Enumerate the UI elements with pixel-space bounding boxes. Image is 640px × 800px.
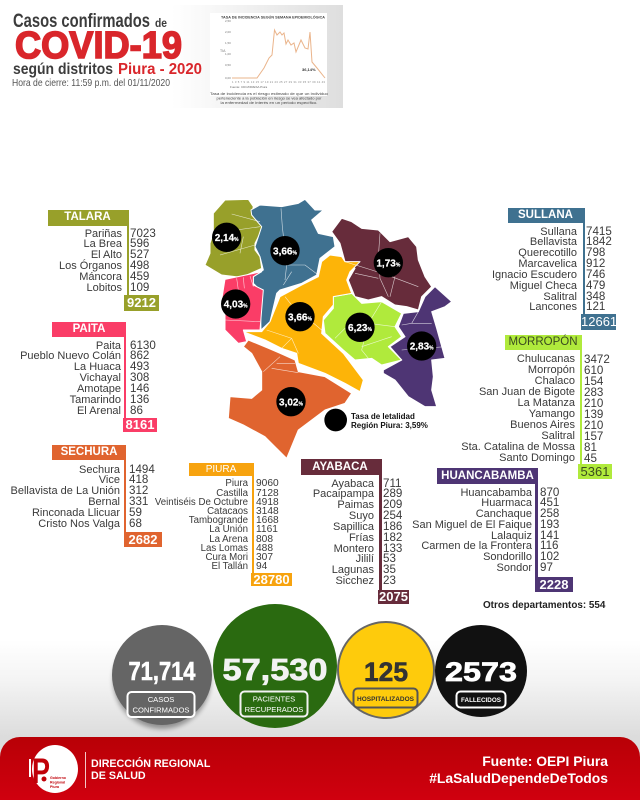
district values: 116 <box>540 539 558 552</box>
heading: Sullana: SULLANA <box>518 209 573 221</box>
district names: Sullana <box>540 226 577 238</box>
heading: Sechura: SECHURA <box>61 446 117 458</box>
district values: 289 <box>383 487 402 500</box>
district names: Huancabamba <box>460 486 532 498</box>
footer heading <box>91 757 210 782</box>
district names: Máncora <box>79 271 122 283</box>
chart value: 36,14% <box>302 67 316 72</box>
logo: Gobierno Regional Piura: Gobierno <box>50 776 67 780</box>
district names: El Arenal <box>77 405 121 417</box>
stat: recovered patients: 57,530 <box>222 652 328 687</box>
line <box>232 30 325 78</box>
legend: regional lethality rate <box>324 409 428 431</box>
heading: Ayabaca <box>301 459 379 475</box>
lethality rate badge: Huancabamba <box>407 331 436 361</box>
district values: 862 <box>130 349 149 362</box>
district values: 68 <box>129 517 142 530</box>
district names: Sapillica <box>333 521 374 533</box>
district names: Ayabaca <box>331 478 374 490</box>
district values: 1161 <box>256 524 278 535</box>
axis labels: 1,00 <box>225 52 231 56</box>
district names: Morropón <box>528 364 575 376</box>
title line: casos confirmados: Casos confirmados <box>13 11 150 32</box>
district values: 3472 <box>584 352 610 366</box>
stat: hospitalized: HOSPITALIZADOS <box>357 696 415 703</box>
district values: 121 <box>586 300 605 313</box>
panel: Sullana <box>492 208 617 330</box>
district values: 53 <box>383 552 396 565</box>
district values: 808 <box>256 534 273 545</box>
heading: Paita: PAITA <box>73 323 105 335</box>
district values: 97 <box>540 561 553 574</box>
heading: Huancabamba: HUANCABAMBA <box>441 470 534 482</box>
district names: Paimas <box>337 499 374 511</box>
province: Sullana <box>251 199 335 330</box>
district values: 35 <box>383 563 396 576</box>
district names: Frías <box>349 532 374 544</box>
logo: Gobierno Regional Piura: Regional <box>50 780 65 784</box>
district names: La Matanza <box>518 396 575 408</box>
district names: Yamango <box>529 408 575 420</box>
district values <box>130 339 156 417</box>
chart footnote <box>210 91 328 105</box>
district names: Montero <box>334 543 374 555</box>
stat: recovered patients <box>213 604 337 728</box>
district values: 157 <box>584 430 603 442</box>
legend: regional lethality rate: Tasa de letalidad <box>351 412 415 421</box>
stat: deaths: FALLECIDOS <box>461 697 502 704</box>
district names: Piura <box>225 478 248 489</box>
panel: Huancabamba <box>412 468 573 592</box>
district names: San Juan de Bigote <box>479 386 575 398</box>
axis labels: 1,50 <box>225 41 231 45</box>
province: Morropón <box>323 293 402 365</box>
district names <box>11 464 120 530</box>
district values: 912 <box>586 257 605 270</box>
district values <box>584 352 610 464</box>
subtitle: según distritos <box>13 61 113 78</box>
other departments note: Otros departamentos: 554 <box>483 600 605 611</box>
heading: Piura: PIURA <box>206 464 236 475</box>
district values: 4918 <box>256 497 279 508</box>
district values: 7415 <box>586 224 612 238</box>
district values: 479 <box>586 279 605 292</box>
district values <box>540 486 559 574</box>
district names: Chalaco <box>535 374 575 386</box>
district values: 193 <box>540 518 559 531</box>
district values: 109 <box>130 281 149 294</box>
district names <box>461 352 575 464</box>
district values: 45 <box>584 452 597 464</box>
total: 2682 <box>129 532 157 547</box>
incidence line chart <box>210 13 328 105</box>
title: COVID-19: COVID-19 <box>15 25 182 67</box>
district values <box>383 476 402 587</box>
stat: hospitalized: 125 <box>364 657 408 687</box>
title line: casos confirmados: de <box>155 18 167 30</box>
district names <box>313 478 374 587</box>
chart footnote: perteneciente a la población en riesgo se vea afectado por <box>216 96 322 100</box>
axis labels: 2,00 <box>225 30 231 34</box>
district names: Lobitos <box>87 282 122 294</box>
district values: 493 <box>130 360 149 373</box>
district names: Tambogrande <box>189 515 248 526</box>
chart footnote: Tasa de incidencia es el riesgo estimado de que un individuo <box>210 91 328 96</box>
lethality rate badge: Paita: 4,03% <box>224 300 248 311</box>
district names: Canchaque <box>476 508 532 520</box>
stat: recovered patients: PACIENTES <box>253 694 295 704</box>
district names: Cristo Nos Valga <box>38 518 120 530</box>
district names: Marcavelica <box>518 258 577 270</box>
lethality rate badge: Huancabamba: 2,83% <box>410 342 434 353</box>
total: 2075 <box>379 589 408 604</box>
district values: 3148 <box>256 506 279 517</box>
divider <box>85 752 86 788</box>
panel: Sechura <box>11 445 162 547</box>
lethality rate badge: Piura <box>285 302 315 331</box>
panel: Talara <box>48 210 159 311</box>
district values: 418 <box>129 473 148 486</box>
district values <box>256 478 279 572</box>
district names: Vichayal <box>80 372 121 384</box>
district names: El Tallán <box>212 561 248 572</box>
district names: Bellavista de La Unión <box>11 485 120 497</box>
district values: 308 <box>130 371 149 384</box>
district names: Sechura <box>79 464 120 476</box>
axis labels: TIA <box>220 49 226 53</box>
district names: Lalaquiz <box>491 530 532 542</box>
district values: 9060 <box>256 478 279 489</box>
district values: 94 <box>256 561 267 572</box>
district values: 312 <box>129 484 148 497</box>
district names: La Unión <box>209 524 248 535</box>
district values: 102 <box>540 550 559 563</box>
district names: Salitral <box>541 430 575 442</box>
panel: Paita <box>20 322 157 432</box>
district values: 139 <box>584 408 603 420</box>
district values: 141 <box>540 528 559 542</box>
district names: Pariñas <box>85 228 122 240</box>
stat: confirmed cases: CONFIRMADOS <box>133 706 189 714</box>
district values: 527 <box>130 248 149 261</box>
stat: confirmed cases: 71,714 <box>128 656 196 686</box>
district names: Catacaos <box>207 506 248 517</box>
district values: 258 <box>540 507 559 520</box>
district names: Pueblo Nuevo Colán <box>20 350 121 362</box>
province: Huancabamba <box>383 287 452 407</box>
lethality rate badge: Ayabaca: 1,73% <box>376 258 401 269</box>
district values: 7023 <box>130 227 156 240</box>
district values: 711 <box>383 476 401 490</box>
district values: 86 <box>130 404 143 417</box>
heading: Talara: TALARA <box>64 211 111 223</box>
source and hashtag: #LaSaludDependeDeTodos <box>429 770 608 786</box>
total: 9212 <box>127 295 156 310</box>
district values: 146 <box>130 382 149 395</box>
district values: 7128 <box>256 488 279 499</box>
subtitle: Piura - 2020 <box>118 61 202 78</box>
lethality rate badge: Talara <box>212 223 241 252</box>
lethality rate badge: Sullana: 3,66% <box>273 246 298 257</box>
district values: 254 <box>383 509 402 522</box>
district values: 596 <box>130 237 149 250</box>
district values <box>129 463 155 530</box>
district names: San Miguel de El Faique <box>412 519 532 531</box>
district names: Carmen de la Frontera <box>421 540 532 552</box>
district names <box>20 340 121 417</box>
lethality rate badge: Ayabaca <box>374 248 403 277</box>
district values: 1842 <box>586 235 612 248</box>
heading: Talara <box>48 210 127 226</box>
header background panel <box>0 5 343 108</box>
district values: 870 <box>540 486 559 498</box>
district names: Salitral <box>543 291 577 303</box>
district names: Sondor <box>497 562 532 574</box>
district names: Tamarindo <box>70 394 121 406</box>
district values: 283 <box>584 386 603 398</box>
lethality rate badge: Piura: 3,66% <box>288 312 313 323</box>
stat: confirmed cases <box>112 625 212 729</box>
lethality rate badge: Sechura <box>276 387 306 416</box>
district names: Miguel Checa <box>510 280 577 292</box>
district names: Paita <box>96 340 121 352</box>
district names: Castilla <box>216 488 248 499</box>
district names: Huarmaca <box>481 497 532 509</box>
source and hashtag <box>429 753 608 786</box>
province: Ayabaca <box>332 218 432 310</box>
stat: hospitalized <box>338 622 434 718</box>
district values: 6130 <box>130 339 156 352</box>
district names: Suyo <box>349 510 374 522</box>
panel: Piura <box>155 463 292 587</box>
axis labels: 0,00 <box>225 76 231 80</box>
district names: Veintiséis De Octubre <box>155 497 248 508</box>
district values: 451 <box>540 496 559 509</box>
stat: deaths <box>435 625 527 717</box>
district values: 210 <box>584 418 603 432</box>
district names: Cura Mori <box>205 552 248 563</box>
heading: Sullana <box>508 208 583 223</box>
district names: Sondorillo <box>483 551 532 563</box>
chart footnote: la enfermedad de interés en un periodo específico. <box>220 100 317 105</box>
district names: Bellavista <box>530 236 577 248</box>
province: Talara <box>205 199 262 277</box>
district names: Los Órganos <box>59 260 122 272</box>
title block <box>12 11 202 89</box>
heading: Paita <box>52 322 126 337</box>
district values: 59 <box>129 506 142 519</box>
total: 5361 <box>581 464 609 479</box>
district values: 498 <box>130 259 149 272</box>
district values: 307 <box>256 552 273 563</box>
district names: Jililí <box>356 553 374 565</box>
district names: La Huaca <box>74 361 121 373</box>
map of Piura provinces <box>206 200 451 458</box>
lethality rate badge: Sechura: 3,02% <box>279 397 304 408</box>
lethality rate badge: Paita <box>221 289 250 319</box>
district values: 459 <box>130 270 149 283</box>
panel: Morropón <box>461 334 612 479</box>
province: Piura <box>243 255 363 392</box>
district names: Ignacio Escudero <box>492 269 577 281</box>
heading: Huancabamba <box>437 468 538 484</box>
district values: 154 <box>584 374 603 388</box>
chart title: TASA DE INCIDENCIA SEGÚN SEMANA EPIDEMIOLÓGICA <box>221 14 325 20</box>
district values: 136 <box>130 393 149 406</box>
district names: Lancones <box>529 301 577 313</box>
district names: Pacaipampa <box>313 488 374 500</box>
district names: Buenos Aires <box>510 418 575 430</box>
district values: 23 <box>383 574 396 587</box>
stat: recovered patients: RECUPERADOS <box>245 705 303 714</box>
district values: 610 <box>584 364 603 376</box>
legend: regional lethality rate: Región Piura: 3,59% <box>351 421 428 430</box>
district values: 210 <box>584 396 603 410</box>
summary statistics <box>110 604 527 732</box>
district values: 798 <box>586 246 605 259</box>
stat: deaths: 2573 <box>445 657 517 687</box>
panel: Ayabaca <box>301 459 409 604</box>
province: Sechura <box>228 340 352 458</box>
total: 28780 <box>253 572 290 587</box>
axis caption: Fuente: CDC/DIRESA Piura <box>230 85 268 89</box>
stat: confirmed cases: CASOS <box>148 695 174 704</box>
district names: El Alto <box>91 249 122 261</box>
heading: Morropón: MORROPÓN <box>508 336 578 348</box>
district names: Chulucanas <box>517 352 575 364</box>
logo: Gobierno Regional Piura: P <box>32 752 50 791</box>
district names <box>492 226 577 313</box>
x axis: 1 3 5 7 9 11 13 15 17 19 21 23 25 27 29 31 33 35 37 39 41 43 <box>232 80 325 84</box>
axis labels: 0,50 <box>225 63 231 67</box>
district names: Vice <box>99 474 120 486</box>
district names: Bernal <box>88 496 120 508</box>
district names <box>59 228 122 294</box>
district names <box>155 478 248 572</box>
district values: 209 <box>383 498 402 511</box>
district names <box>412 486 532 574</box>
district names: La Arena <box>209 534 248 545</box>
district values: 1494 <box>129 463 155 476</box>
district values: 488 <box>256 543 273 554</box>
district values: 746 <box>586 268 605 281</box>
district values <box>130 227 156 294</box>
axis labels: 2,50 <box>225 19 231 23</box>
district values: 331 <box>129 495 148 508</box>
axis labels <box>220 19 231 80</box>
district values: 348 <box>586 290 605 303</box>
logo: Gobierno Regional Piura: Piura <box>50 785 60 789</box>
district names: Sicchez <box>335 575 374 587</box>
lethality rate badge: Sullana <box>270 236 300 265</box>
district names: La Brea <box>83 238 122 250</box>
lethality rate badge: Morropón <box>345 313 375 342</box>
province: Paita <box>222 272 263 343</box>
district names: Santo Domingo <box>499 452 575 464</box>
district values: 1668 <box>256 515 279 526</box>
district names: Las Lomas <box>201 543 248 554</box>
subtitle <box>13 61 202 78</box>
heading: Sechura <box>52 445 126 460</box>
lethality rate badge: Talara: 2,14% <box>215 233 239 244</box>
logo: Gobierno Regional Piura <box>29 745 78 793</box>
district names: Rinconada Llicuar <box>32 507 120 519</box>
district names: Querecotillo <box>518 247 577 259</box>
district values: 186 <box>383 520 402 533</box>
heading: Piura <box>189 463 253 476</box>
district names: Sta. Catalina de Mossa <box>461 440 575 452</box>
lethality rate badge: Morropón: 6,23% <box>348 323 373 334</box>
district values <box>586 224 612 313</box>
district names: Lagunas <box>332 564 374 576</box>
district values: 133 <box>383 542 402 555</box>
district names: Amotape <box>77 383 121 395</box>
footer band <box>0 737 640 800</box>
total: 12661 <box>581 314 617 329</box>
district values: 182 <box>383 531 402 544</box>
district values: 81 <box>584 440 597 454</box>
closing time: Hora de cierre: 11:59 p.m. del 01/11/2020 <box>12 77 170 89</box>
total: 8161 <box>126 417 154 432</box>
source and hashtag: Fuente: OEPI Piura <box>482 753 608 769</box>
total: 2228 <box>540 577 568 592</box>
footer heading: DIRECCIÓN REGIONAL <box>91 758 210 770</box>
heading: Ayabaca: AYABACA <box>312 461 368 473</box>
footer heading: DE SALUD <box>91 770 146 782</box>
